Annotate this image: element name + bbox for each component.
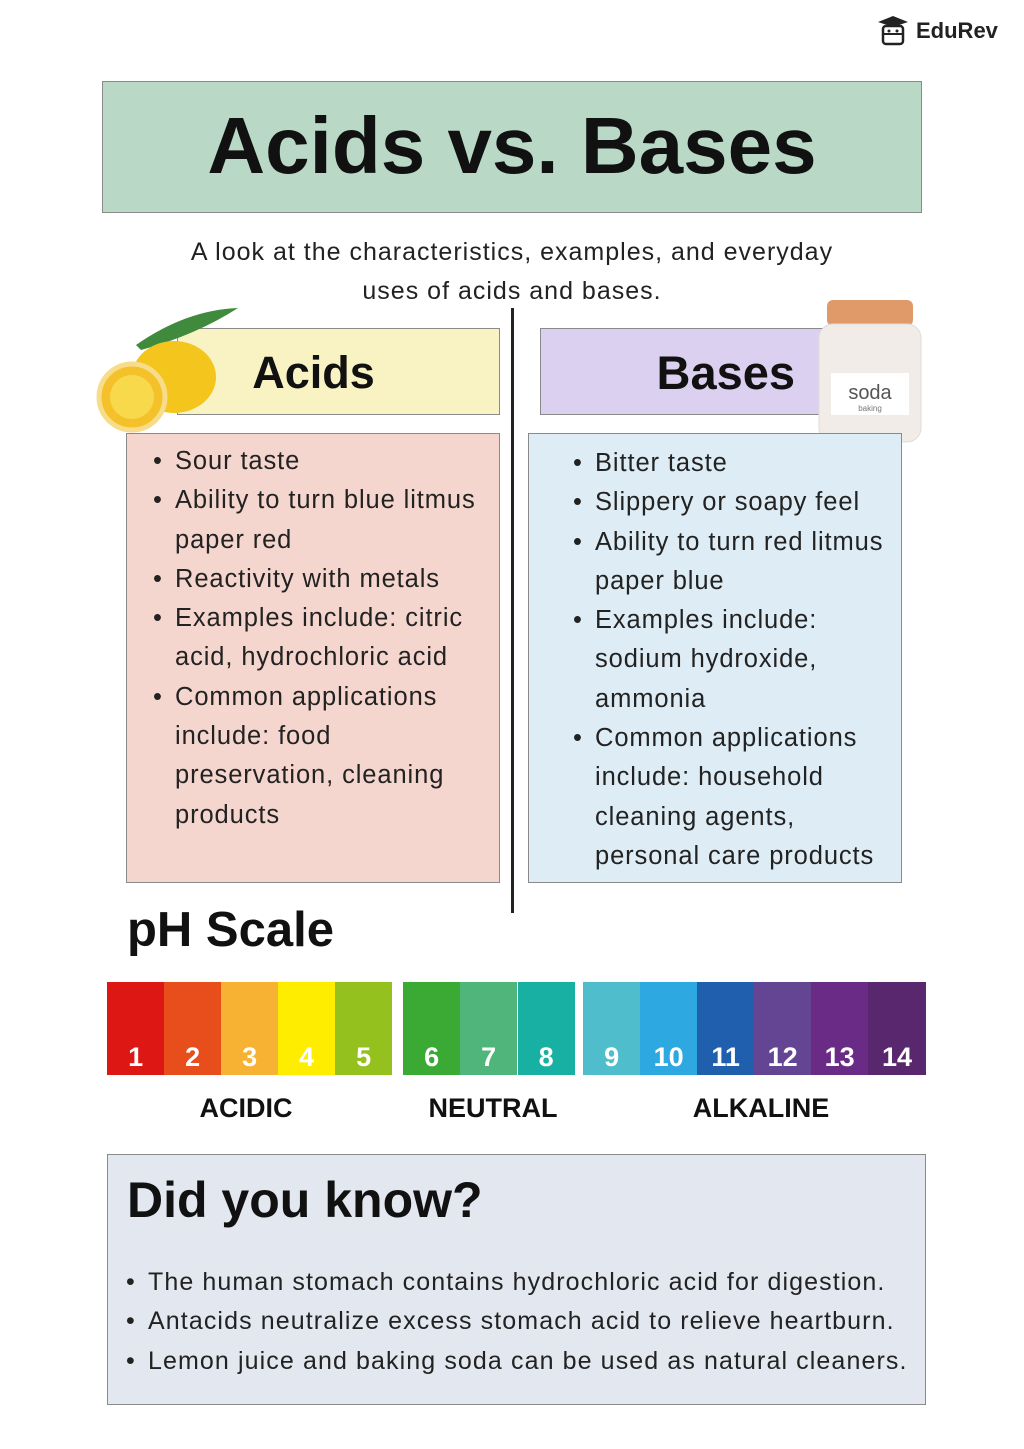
pH bar: 3 (242, 1042, 257, 1072)
pH labels: NEUTRAL (428, 1093, 558, 1123)
acids body: Ability to turn blue litmus paper red (175, 486, 476, 554)
icon: soda jar (818, 300, 922, 442)
title (102, 81, 922, 213)
acids body: Common applications include: food preservation, cleaning products (175, 683, 444, 829)
logo (878, 16, 998, 46)
pH bar: 10 (654, 1042, 684, 1072)
did you know panel: Lemon juice and baking soda can be used as natural cleaners. (148, 1347, 908, 1375)
pH bar: 8 (539, 1042, 554, 1072)
acids body: Sour taste (175, 447, 300, 475)
title: Acids vs. Bases (207, 101, 817, 190)
logo: EduRev (916, 18, 998, 43)
icon: lemon (96, 308, 238, 432)
pH bar: 13 (825, 1042, 855, 1072)
pH bar: 1 (128, 1042, 143, 1072)
icon: soda jar: soda (848, 382, 893, 404)
did you know panel: Did you know? (127, 1172, 483, 1228)
pH bar: 4 (299, 1042, 314, 1072)
pH bar: 7 (481, 1042, 496, 1072)
bases body: Bitter taste (595, 449, 728, 477)
icon: soda jar: baking (858, 404, 882, 413)
subtitle (191, 238, 833, 305)
bases body: Slippery or soapy feel (595, 488, 860, 516)
bases body: Common applications include: household cleaning agents, personal care products (595, 724, 874, 870)
acids header (177, 328, 500, 415)
pH scale heading: pH Scale (127, 903, 334, 957)
bases body (528, 433, 902, 883)
bases header (540, 328, 840, 415)
pH labels (200, 1093, 829, 1123)
pH bar: 11 (711, 1042, 740, 1072)
pH bar: 2 (185, 1042, 200, 1072)
did you know panel: Antacids neutralize excess stomach acid to relieve heartburn. (148, 1307, 895, 1335)
bases body: Ability to turn red litmus paper blue (595, 528, 883, 595)
pH bar: 6 (424, 1042, 439, 1072)
did you know panel: The human stomach contains hydrochloric acid for digestion. (148, 1268, 885, 1296)
pH bar: 5 (356, 1042, 371, 1072)
bases body: Examples include: sodium hydroxide, ammonia (595, 606, 817, 713)
pH bar: 12 (768, 1042, 798, 1072)
pH bar: 14 (882, 1042, 912, 1072)
acids body (126, 433, 500, 883)
subtitle: uses of acids and bases. (362, 277, 662, 305)
acids body: Reactivity with metals (175, 565, 440, 593)
bases header: Bases (656, 346, 795, 399)
did you know panel (107, 1154, 926, 1405)
acids body: Examples include: citric acid, hydrochloric acid (175, 604, 463, 671)
pH labels: ALKALINE (693, 1093, 829, 1123)
subtitle: A look at the characteristics, examples, and everyday (191, 238, 833, 266)
pH labels: ACIDIC (200, 1093, 292, 1123)
pH bar: 9 (604, 1042, 619, 1072)
pH bar (107, 982, 926, 1075)
acids header: Acids (252, 347, 375, 398)
